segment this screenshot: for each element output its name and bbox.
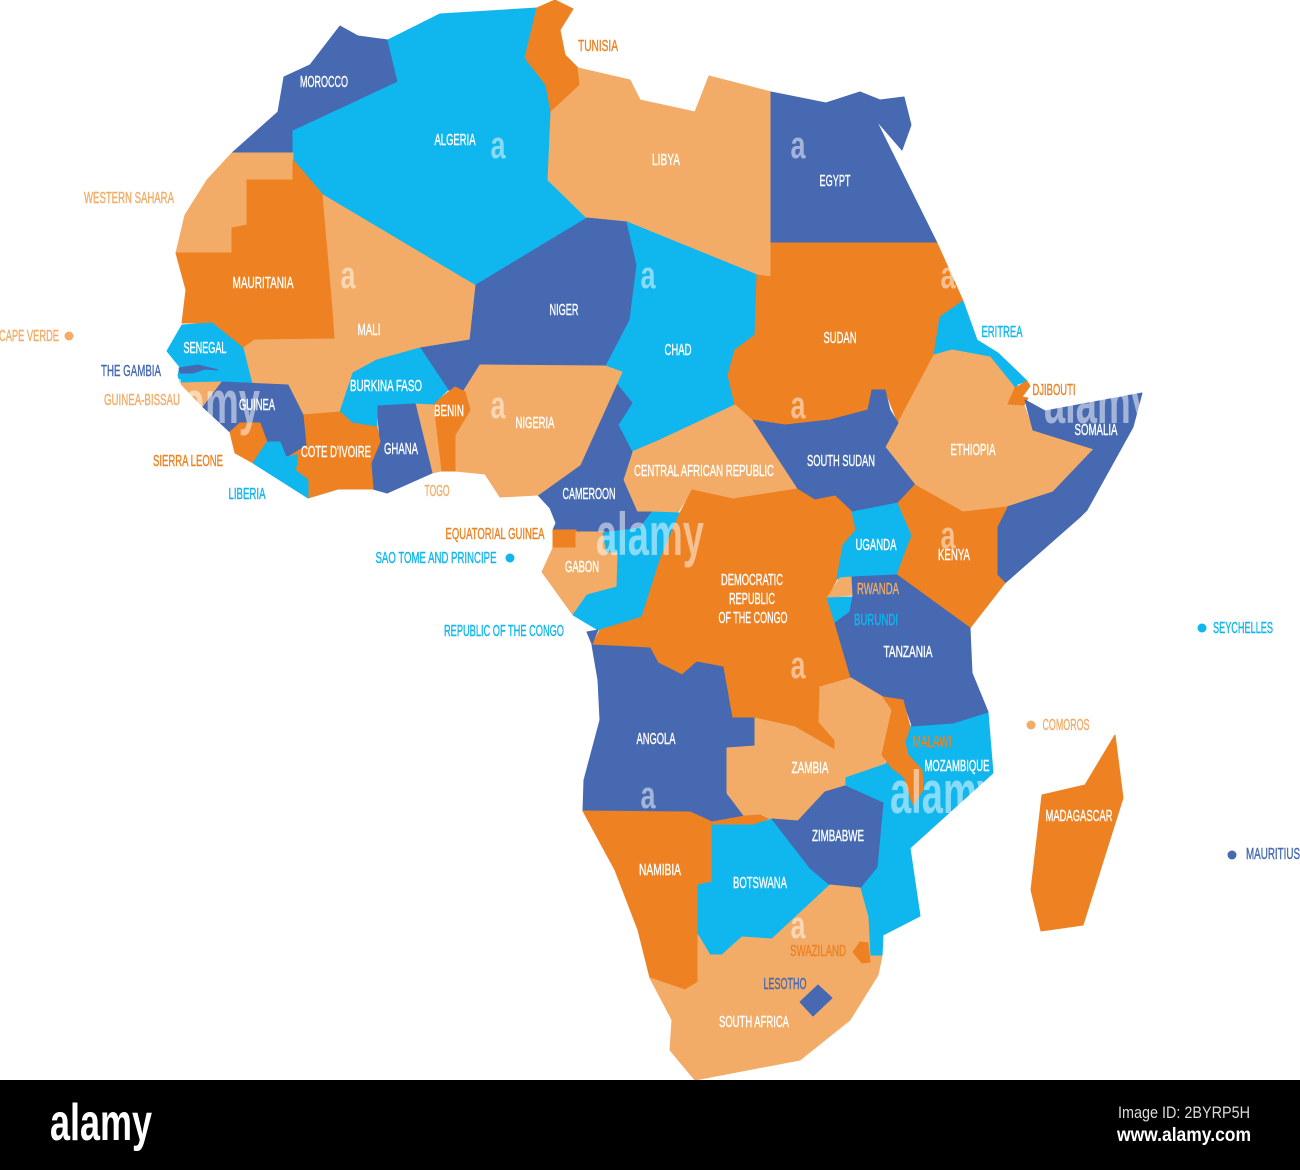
label: Uganda: UGANDA bbox=[856, 537, 897, 554]
watermark: alamy south-east: alamy bbox=[890, 759, 998, 826]
country: Zambia bbox=[727, 678, 892, 821]
island markers bbox=[64, 332, 1236, 860]
label: Swaziland: SWAZILAND bbox=[790, 943, 846, 960]
country: Togo bbox=[415, 403, 441, 473]
label: Madagascar: MADAGASCAR bbox=[1046, 808, 1112, 825]
country: Cabinda bbox=[587, 630, 598, 644]
marker: Comoros bbox=[1026, 720, 1036, 730]
label: Namibia: NAMIBIA bbox=[639, 862, 681, 879]
label: Liberia: LIBERIA bbox=[228, 486, 266, 503]
footer logo: alamy: alamy bbox=[50, 1094, 152, 1152]
marker: Sao Tome and Principe bbox=[506, 554, 514, 562]
country: Cameroon bbox=[538, 378, 652, 533]
country: Nigeria bbox=[455, 365, 622, 497]
country: Namibia bbox=[583, 811, 768, 990]
country: Djibouti bbox=[1008, 381, 1030, 405]
label: Gabon: GABON bbox=[565, 559, 599, 576]
label: Ethiopia: ETHIOPIA bbox=[950, 442, 996, 459]
label: Djibouti: DJIBOUTI bbox=[1032, 382, 1076, 399]
watermark overlay bbox=[152, 125, 1152, 947]
watermark: letter a: a bbox=[940, 515, 956, 557]
country: South Africa bbox=[650, 885, 882, 1080]
country: Equatorial Guinea bbox=[553, 530, 576, 548]
label: Sierra Leone: SIERRA LEONE bbox=[153, 453, 223, 470]
label: Chad: CHAD bbox=[664, 342, 692, 359]
country: Angola bbox=[583, 645, 755, 822]
panel: country shapes bbox=[167, 0, 1142, 1080]
label: Ghana: GHANA bbox=[384, 441, 418, 458]
country: Kenya bbox=[897, 485, 1007, 628]
country: Mali bbox=[243, 195, 476, 415]
watermark: letter a: a bbox=[940, 255, 956, 297]
label: Eritrea: ERITREA bbox=[982, 324, 1023, 341]
watermark: alamy centre: alamy bbox=[596, 501, 704, 568]
label: Nigeria: NIGERIA bbox=[516, 415, 555, 432]
country: Uganda bbox=[837, 503, 912, 579]
country: Guinea-Bissau bbox=[180, 382, 222, 407]
label: Western Sahara: WESTERN SAHARA bbox=[84, 190, 174, 207]
label: Burundi: BURUNDI bbox=[854, 612, 898, 629]
country: Burundi bbox=[827, 597, 852, 623]
label: Libya: LIBYA bbox=[652, 152, 680, 169]
watermark: alamy east: alamy bbox=[1044, 369, 1152, 436]
watermark: alamy west: alamy bbox=[152, 369, 260, 436]
country: Tanzania bbox=[835, 575, 988, 726]
marker: Mauritius bbox=[1228, 850, 1236, 860]
label: Republic of the Congo: REPUBLIC OF THE CONGO bbox=[444, 623, 564, 640]
footer: image ID: Image ID: 2BYRP5H bbox=[1118, 1103, 1250, 1122]
marker: Seychelles bbox=[1198, 624, 1206, 632]
country: Mauritania bbox=[176, 160, 335, 348]
label: Guinea-Bissau: GUINEA-BISSAU bbox=[104, 392, 180, 409]
label: Togo: TOGO bbox=[424, 483, 450, 500]
country: South Sudan bbox=[752, 390, 915, 512]
country: Democratic Republic of the Congo bbox=[592, 489, 856, 750]
country: Rwanda bbox=[827, 577, 853, 598]
label: Guinea: GUINEA bbox=[239, 397, 275, 414]
country: Madagascar bbox=[1031, 735, 1123, 931]
label: Democratic Republic of the Congo: DEMOCRATIC bbox=[721, 572, 783, 589]
label: Mozambique: MOZAMBIQUE bbox=[924, 758, 990, 775]
label: Mali: MALI bbox=[358, 322, 380, 339]
watermark: letter a: a bbox=[340, 255, 356, 297]
country: Malawi bbox=[882, 697, 923, 805]
watermark: letter a: a bbox=[790, 905, 806, 947]
label: Tunisia: TUNISIA bbox=[578, 38, 618, 55]
country: Zimbabwe bbox=[772, 786, 883, 888]
label: Benin: BENIN bbox=[434, 403, 464, 420]
label: The Gambia: THE GAMBIA bbox=[101, 363, 161, 380]
label: Democratic Republic of the Congo: OF THE CONGO bbox=[718, 610, 788, 627]
watermark: letter a: a bbox=[790, 125, 806, 167]
label: Tanzania: TANZANIA bbox=[884, 644, 933, 661]
label: Zambia: ZAMBIA bbox=[792, 760, 829, 777]
country: Niger bbox=[420, 218, 637, 392]
label: Cape Verde: CAPE VERDE bbox=[0, 328, 59, 345]
country: Burkina Faso bbox=[340, 348, 448, 427]
label: Egypt: EGYPT bbox=[820, 173, 851, 190]
country: Somalia bbox=[997, 393, 1142, 583]
country: Mozambique bbox=[845, 712, 993, 956]
country: Morocco bbox=[232, 26, 398, 153]
watermark: letter a: a bbox=[790, 385, 806, 427]
country: Republic of the Congo bbox=[573, 512, 680, 630]
country: Senegal bbox=[167, 323, 252, 384]
label: Algeria: ALGERIA bbox=[434, 132, 476, 149]
label: Sao Tome and Principe: SAO TOME AND PRINCIPE bbox=[376, 550, 496, 567]
country: Algeria bbox=[293, 8, 587, 285]
country: Liberia bbox=[253, 442, 308, 498]
footer: website: www.alamy.com bbox=[1116, 1125, 1251, 1146]
label: Equatorial Guinea: EQUATORIAL GUINEA bbox=[446, 526, 545, 543]
label: Cameroon: CAMEROON bbox=[562, 486, 616, 503]
country: Sudan bbox=[728, 243, 963, 425]
label: Democratic Republic of the Congo bbox=[718, 572, 788, 627]
country: Libya bbox=[548, 68, 771, 277]
label: Comoros: COMOROS bbox=[1042, 717, 1090, 734]
country: Benin bbox=[433, 387, 470, 471]
country: Swaziland bbox=[853, 942, 870, 963]
watermark: letter a: a bbox=[490, 125, 506, 167]
country: Eritrea bbox=[934, 301, 1027, 388]
label: Senegal: SENEGAL bbox=[184, 340, 227, 357]
footer bar bbox=[0, 1080, 1300, 1170]
label: South Sudan: SOUTH SUDAN bbox=[807, 453, 875, 470]
label: Central African Republic: CENTRAL AFRICAN REPUBLIC bbox=[634, 463, 774, 480]
watermark: letter a: a bbox=[790, 645, 806, 687]
country: Gabon bbox=[542, 532, 618, 615]
country: The Gambia bbox=[179, 365, 218, 373]
label: Burkina Faso: BURKINA FASO bbox=[350, 378, 422, 395]
label: Kenya: KENYA bbox=[938, 547, 970, 564]
label: Malawi: MALAWI bbox=[912, 734, 952, 751]
watermark: letter a: a bbox=[490, 385, 506, 427]
country: Central African Republic bbox=[623, 405, 797, 512]
label: Cote d'Ivoire: COTE D'IVOIRE bbox=[301, 444, 371, 461]
country: Western Sahara bbox=[176, 153, 293, 253]
label: Sudan: SUDAN bbox=[824, 330, 856, 347]
label: South Africa: SOUTH AFRICA bbox=[719, 1014, 789, 1031]
label: Rwanda: RWANDA bbox=[857, 581, 899, 598]
marker: Cape Verde bbox=[64, 332, 74, 340]
watermark: letter a: a bbox=[640, 775, 656, 817]
label: Democratic Republic of the Congo: REPUBLIC bbox=[729, 591, 775, 608]
country: Tunisia bbox=[525, 0, 580, 112]
label: Botswana: BOTSWANA bbox=[733, 875, 787, 892]
country: Cote d'Ivoire bbox=[286, 412, 380, 498]
country: Chad bbox=[605, 222, 757, 452]
country: Egypt bbox=[771, 92, 937, 243]
label: Angola: ANGOLA bbox=[636, 731, 676, 748]
country: Guinea bbox=[203, 382, 306, 457]
country: Ethiopia bbox=[885, 350, 1094, 512]
country: Botswana bbox=[698, 819, 830, 955]
label: Mauritania: MAURITANIA bbox=[232, 275, 294, 292]
country: Lesotho bbox=[800, 985, 832, 1016]
country: Sierra Leone bbox=[230, 423, 267, 463]
watermark: letter a: a bbox=[640, 255, 656, 297]
label: Morocco: MOROCCO bbox=[300, 74, 348, 91]
country: Ghana bbox=[371, 403, 432, 493]
label: Lesotho: LESOTHO bbox=[764, 976, 806, 993]
label: Zimbabwe: ZIMBABWE bbox=[812, 828, 864, 845]
label: Somalia: SOMALIA bbox=[1074, 422, 1118, 439]
label: Niger: NIGER bbox=[550, 302, 578, 319]
